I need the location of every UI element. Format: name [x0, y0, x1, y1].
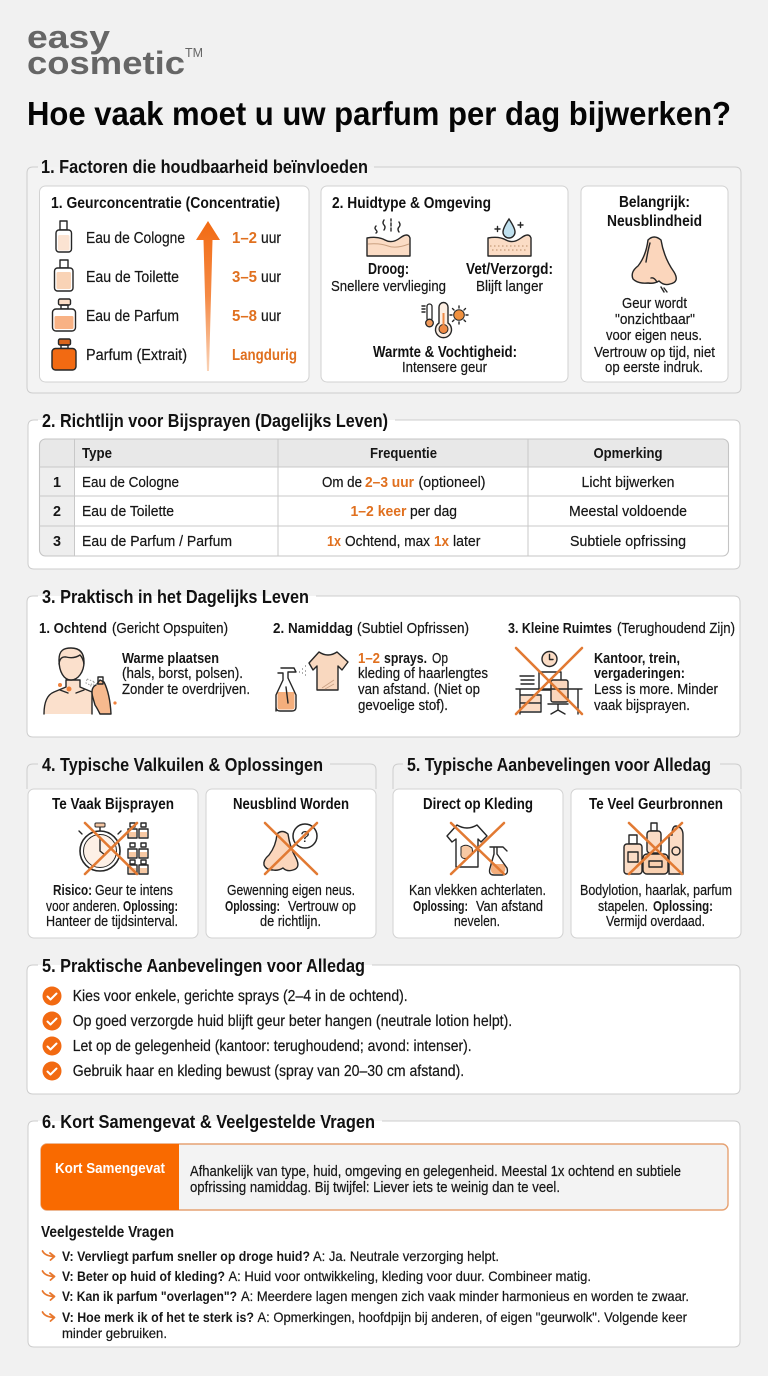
- panel: 2. richtlijn voor bijsprayen: [28, 410, 740, 569]
- card: geurconcentratie: [40, 186, 309, 382]
- callout: kort samengevat: Afhankelijk van type, huid, omgeving en gelegenheid. Meestal 1x ochtend en subtiele: [190, 1164, 681, 1180]
- table row 2: 1–2 keer: [350, 503, 407, 520]
- table row 2: [53, 503, 687, 520]
- checklist item 1: Kies voor enkele, gerichte sprays (2–4 in de ochtend).: [73, 988, 408, 1005]
- table row 3: 3: [53, 533, 61, 550]
- cross mark: [451, 823, 504, 874]
- card: te veel geurbronnen: [571, 789, 741, 938]
- heading: section 2: 2. Richtlijn voor Bijsprayen (Dagelijks Leven): [42, 410, 388, 431]
- label: vet verzorgd: [466, 261, 553, 295]
- panel: 1. factoren: [27, 156, 741, 393]
- faq item 1: V: Vervliegt parfum sneller op droge huid?: [62, 1248, 310, 1264]
- text: neusblindheid uitleg: "onzichtbaar": [615, 311, 695, 328]
- panel: 6. kort samengevat en vragen: [28, 1111, 740, 1347]
- duration values: uur: [261, 308, 281, 325]
- text: neusblindheid uitleg: op eerste indruk.: [605, 359, 703, 376]
- arrow: concentration gradient: [196, 221, 220, 371]
- column: ochtend: [39, 620, 250, 714]
- text: risico: Hanteer de tijdsinterval.: [46, 913, 178, 930]
- label: warmte en vochtigheid: [373, 344, 517, 376]
- label: vet verzorgd: Vet/Verzorgd:: [466, 261, 553, 278]
- label: droog: Droog:: [368, 261, 409, 278]
- text: gewenning: Vertrouw op: [288, 898, 356, 915]
- column: kleine ruimtes: [508, 620, 735, 714]
- faq item 4: [42, 1309, 687, 1341]
- column heading: namiddag: (Subtiel Opfrissen): [357, 620, 469, 637]
- text: warme plaatsen: [122, 650, 250, 698]
- title: Hoe vaak moet u uw parfum per dag bijwerken?: [27, 95, 731, 132]
- icon: shirt with spray crossed: [447, 823, 507, 875]
- card title: neusblind worden: Neusblind Worden: [233, 796, 349, 813]
- column heading: ochtend: (Gericht Opspuiten): [112, 620, 228, 637]
- text: 1-2 sprays: sprays.: [384, 650, 427, 667]
- faq item 1: [42, 1248, 499, 1264]
- callout: kort samengevat: [41, 1144, 728, 1210]
- icon: nose: [632, 237, 676, 292]
- duration values: 3–5: [232, 269, 257, 286]
- panel: 4. typische valkuilen: [27, 754, 376, 938]
- text: kan vlekken: nevelen.: [454, 913, 500, 930]
- logo: easy cosmetic: TM: [185, 45, 203, 60]
- faq item 3: A: Meerdere lagen mengen zich vaak minder harmonieus en worden te zwaar.: [241, 1288, 689, 1304]
- label: droog: [331, 261, 446, 295]
- text: bodylotion: Oplossing:: [653, 898, 713, 915]
- checklist item 3: Let op de gelegenheid (kantoor: terughoudend; avond: intenser).: [73, 1038, 472, 1055]
- text: gewenning: Oplossing:: [225, 898, 280, 915]
- column heading: ochtend: 1. Ochtend: [39, 620, 107, 637]
- logo: easy cosmetic: [27, 19, 203, 81]
- cross mark: [85, 823, 137, 874]
- label: warmte en vochtigheid: Warmte & Vochtigheid:: [373, 344, 517, 361]
- table row 3: 1x: [327, 533, 342, 550]
- panel: 5. typische aanbevelingen: [393, 754, 741, 938]
- card: neusblindheid: [581, 186, 728, 382]
- text: kantoor trein vergaderingen: vergaderingen:: [594, 665, 685, 682]
- logo: easy cosmetic: cosmetic: [27, 45, 185, 81]
- faq item 3: [42, 1288, 689, 1304]
- table header: Type: [82, 445, 112, 462]
- heading: section 1: 1. Factoren die houdbaarheid beïnvloeden: [41, 156, 368, 177]
- icon: eau de parfum bottle: [52, 299, 76, 331]
- duration values: [232, 230, 297, 364]
- table row 3: Subtiele opfrissing: [570, 533, 686, 550]
- table row 2: Eau de Toilette: [82, 503, 174, 520]
- icon: nose with question crossed: [264, 823, 317, 874]
- text: risico: [46, 882, 178, 930]
- card heading: huidtype: 2. Huidtype & Omgeving: [332, 195, 491, 212]
- table row 2: per dag: [410, 503, 457, 520]
- card title: te vaak bijsprayen: Te Vaak Bijsprayen: [52, 796, 174, 813]
- table row 3: 1x: [434, 533, 450, 550]
- text: 1-2 sprays: van afstand. (Niet op: [358, 681, 480, 698]
- card heading: geurconcentratie: 1. Geurconcentratie (Concentratie): [51, 195, 280, 212]
- text: 1-2 sprays: Op: [432, 650, 448, 667]
- callout: kort samengevat: Kort Samengevat: [55, 1160, 165, 1177]
- panel: 5. praktische aanbevelingen: [27, 955, 740, 1094]
- heading: praktische aanbevelingen: 5. Praktische Aanbevelingen voor Alledag: [42, 955, 365, 976]
- text: risico: Geur te intens: [95, 882, 173, 899]
- icon: dry skin: [367, 219, 410, 256]
- text: kan vlekken: Kan vlekken achterlaten.: [409, 882, 546, 899]
- table row 1: 1: [53, 474, 61, 491]
- faq item 4: A: Opmerkingen, hoofdpijn bij anderen, of eigen "geurwolk". Volgende keer: [258, 1309, 687, 1325]
- card heading: neusblindheid: Belangrijk:: [619, 194, 690, 211]
- checklist item 2: Op goed verzorgde huid blijft geur beter hangen (neutrale lotion helpt).: [73, 1013, 512, 1030]
- card title: te veel geurbronnen: Te Veel Geurbronnen: [589, 796, 723, 813]
- text: warme plaatsen: Zonder te overdrijven.: [122, 681, 250, 698]
- column heading: ochtend: [39, 620, 228, 637]
- text: gewenning: Gewenning eigen neus.: [227, 882, 355, 899]
- table row 3: Eau de Parfum / Parfum: [82, 533, 232, 550]
- text: neusblindheid uitleg: [594, 295, 716, 376]
- label: droog: Snellere vervlieging: [331, 278, 446, 295]
- duration values: uur: [261, 230, 281, 247]
- text: bodylotion: Vermijd overdaad.: [606, 913, 705, 930]
- text: bodylotion: Bodylotion, haarlak, parfum: [580, 882, 732, 899]
- table row 2: 2: [53, 503, 61, 520]
- column heading: namiddag: 2. Namiddag: [273, 620, 353, 637]
- table: richtlijn: [40, 439, 728, 556]
- faq item 1: A: Ja. Neutrale verzorging helpt.: [313, 1248, 499, 1264]
- icon: nose with question crossed: ?: [300, 829, 310, 846]
- table row 1: [53, 474, 674, 491]
- card heading: neusblindheid: [607, 194, 702, 230]
- card: huidtype en omgeving: [321, 186, 568, 382]
- column: namiddag: [273, 620, 488, 714]
- text: 1-2 sprays: 1–2: [358, 650, 380, 667]
- label: warmte en vochtigheid: Intensere geur: [402, 359, 487, 376]
- text: kan vlekken: [409, 882, 546, 930]
- card heading: neusblindheid: Neusblindheid: [607, 213, 702, 230]
- table row 1: Licht bijwerken: [582, 474, 674, 491]
- text: warme plaatsen: Warme plaatsen: [122, 650, 219, 667]
- duration values: uur: [261, 269, 281, 286]
- concentration labels: Parfum (Extrait): [86, 347, 187, 364]
- text: kantoor trein vergaderingen: Less is more. Minder: [594, 681, 718, 698]
- text: 1-2 sprays: gevoelige stof).: [358, 697, 448, 714]
- icon: person spraying neck: [44, 648, 117, 714]
- column heading: kleine ruimtes: 3. Kleine Ruimtes: [508, 620, 612, 637]
- text: kantoor trein vergaderingen: [594, 650, 718, 714]
- text: neusblindheid uitleg: voor eigen neus.: [606, 327, 702, 344]
- table row 2: Meestal voldoende: [569, 503, 687, 520]
- text: kan vlekken: Van afstand: [476, 898, 543, 915]
- callout: kort samengevat: opfrissing namiddag. Bij twijfel: Liever iets te weinig dan te veel.: [190, 1180, 560, 1196]
- text: bodylotion: [580, 882, 732, 930]
- text: risico: Risico:: [53, 882, 92, 899]
- card: te vaak bijsprayen: [28, 789, 198, 938]
- text: 1-2 sprays: [358, 650, 488, 714]
- faq item 2: A: Huid voor ontwikkeling, kleding voor duur. Combineer matig.: [228, 1268, 591, 1284]
- table row 3: [53, 533, 686, 550]
- heading: typische aanbevelingen: 5. Typische Aanbevelingen voor Alledag: [407, 754, 711, 775]
- heading: veelgestelde vragen: Veelgestelde Vragen: [41, 1224, 174, 1241]
- cross mark: [629, 823, 682, 874]
- faq item 4: V: Hoe merk ik of het te sterk is?: [62, 1309, 254, 1325]
- concentration labels: Eau de Toilette: [86, 269, 179, 286]
- duration values: Langdurig: [232, 347, 297, 364]
- text: neusblindheid uitleg: Geur wordt: [622, 295, 688, 312]
- table row 3: Ochtend, max: [345, 533, 430, 550]
- text: gewenning: de richtlijn.: [260, 913, 321, 930]
- heading: section 6: 6. Kort Samengevat & Veelgestelde Vragen: [42, 1111, 375, 1132]
- concentration labels: [86, 230, 187, 364]
- concentration labels: Eau de Cologne: [86, 230, 185, 247]
- text: kantoor trein vergaderingen: vaak bijsprayen.: [594, 697, 690, 714]
- faq item 2: [42, 1268, 591, 1284]
- label: vet verzorgd: Blijft langer: [476, 278, 543, 295]
- text: gewenning: [225, 882, 356, 930]
- panel: 3. praktisch in het dagelijks leven: [27, 586, 740, 737]
- heading: section 4: 4. Typische Valkuilen & Oplossingen: [42, 754, 323, 775]
- duration values: 5–8: [232, 308, 257, 325]
- concentration labels: Eau de Parfum: [86, 308, 179, 325]
- text: risico: voor anderen.: [46, 898, 120, 915]
- card: direct op kleding: [393, 789, 563, 938]
- cross mark: [265, 823, 317, 874]
- logo: easy cosmetic: easy: [27, 19, 110, 55]
- table row 1: Eau de Cologne: [82, 474, 179, 491]
- text: warme plaatsen: (hals, borst, polsen).: [122, 665, 243, 682]
- icon: thermometers and sun: [422, 302, 468, 338]
- text: kan vlekken: Oplossing:: [413, 898, 468, 915]
- faq item 2: V: Beter op huid of kleding?: [62, 1268, 225, 1284]
- table header: [82, 445, 662, 462]
- icon: crossed out office: [516, 648, 582, 714]
- faq item 3: V: Kan ik parfum "overlagen"?: [62, 1288, 237, 1304]
- column heading: kleine ruimtes: [508, 620, 735, 637]
- table header: Frequentie: [370, 445, 437, 462]
- heading: section 3: 3. Praktisch in het Dagelijks Leven: [42, 586, 309, 607]
- icon: spray bottle and t-shirt: [276, 652, 348, 711]
- card: neusblind worden: [206, 789, 376, 938]
- duration values: 1–2: [232, 230, 257, 247]
- table row 3: later: [453, 533, 480, 550]
- icon: stopwatch and bottles crossed: [79, 823, 148, 874]
- text: neusblindheid uitleg: Vertrouw op tijd, niet: [594, 344, 716, 361]
- column heading: namiddag: [273, 620, 469, 637]
- checklist item 4: Gebruik haar en kleding bewust (spray van 20–30 cm afstand).: [73, 1063, 464, 1080]
- icon: eau de cologne bottle: [56, 221, 72, 252]
- table row 1: (optioneel): [418, 474, 486, 491]
- icon: stacked products crossed: [624, 823, 683, 874]
- table row 1: Om de: [322, 474, 362, 491]
- icon: hydrated skin: [488, 219, 531, 256]
- text: kantoor trein vergaderingen: Kantoor, trein,: [594, 650, 680, 667]
- faq item 4: minder gebruiken.: [62, 1325, 167, 1341]
- icon: parfum extrait bottle: [52, 339, 76, 370]
- icon: eau de toilette bottle: [54, 260, 73, 291]
- card title: direct op kleding: Direct op Kleding: [423, 796, 533, 813]
- cross mark: [516, 648, 582, 714]
- table header: Opmerking: [594, 445, 662, 462]
- column heading: kleine ruimtes: (Terughoudend Zijn): [617, 620, 735, 637]
- text: risico: Oplossing:: [123, 898, 178, 915]
- table row 1: 2–3 uur: [365, 474, 414, 491]
- text: 1-2 sprays: kleding of haarlengtes: [358, 665, 488, 682]
- text: bodylotion: stapelen.: [598, 898, 648, 915]
